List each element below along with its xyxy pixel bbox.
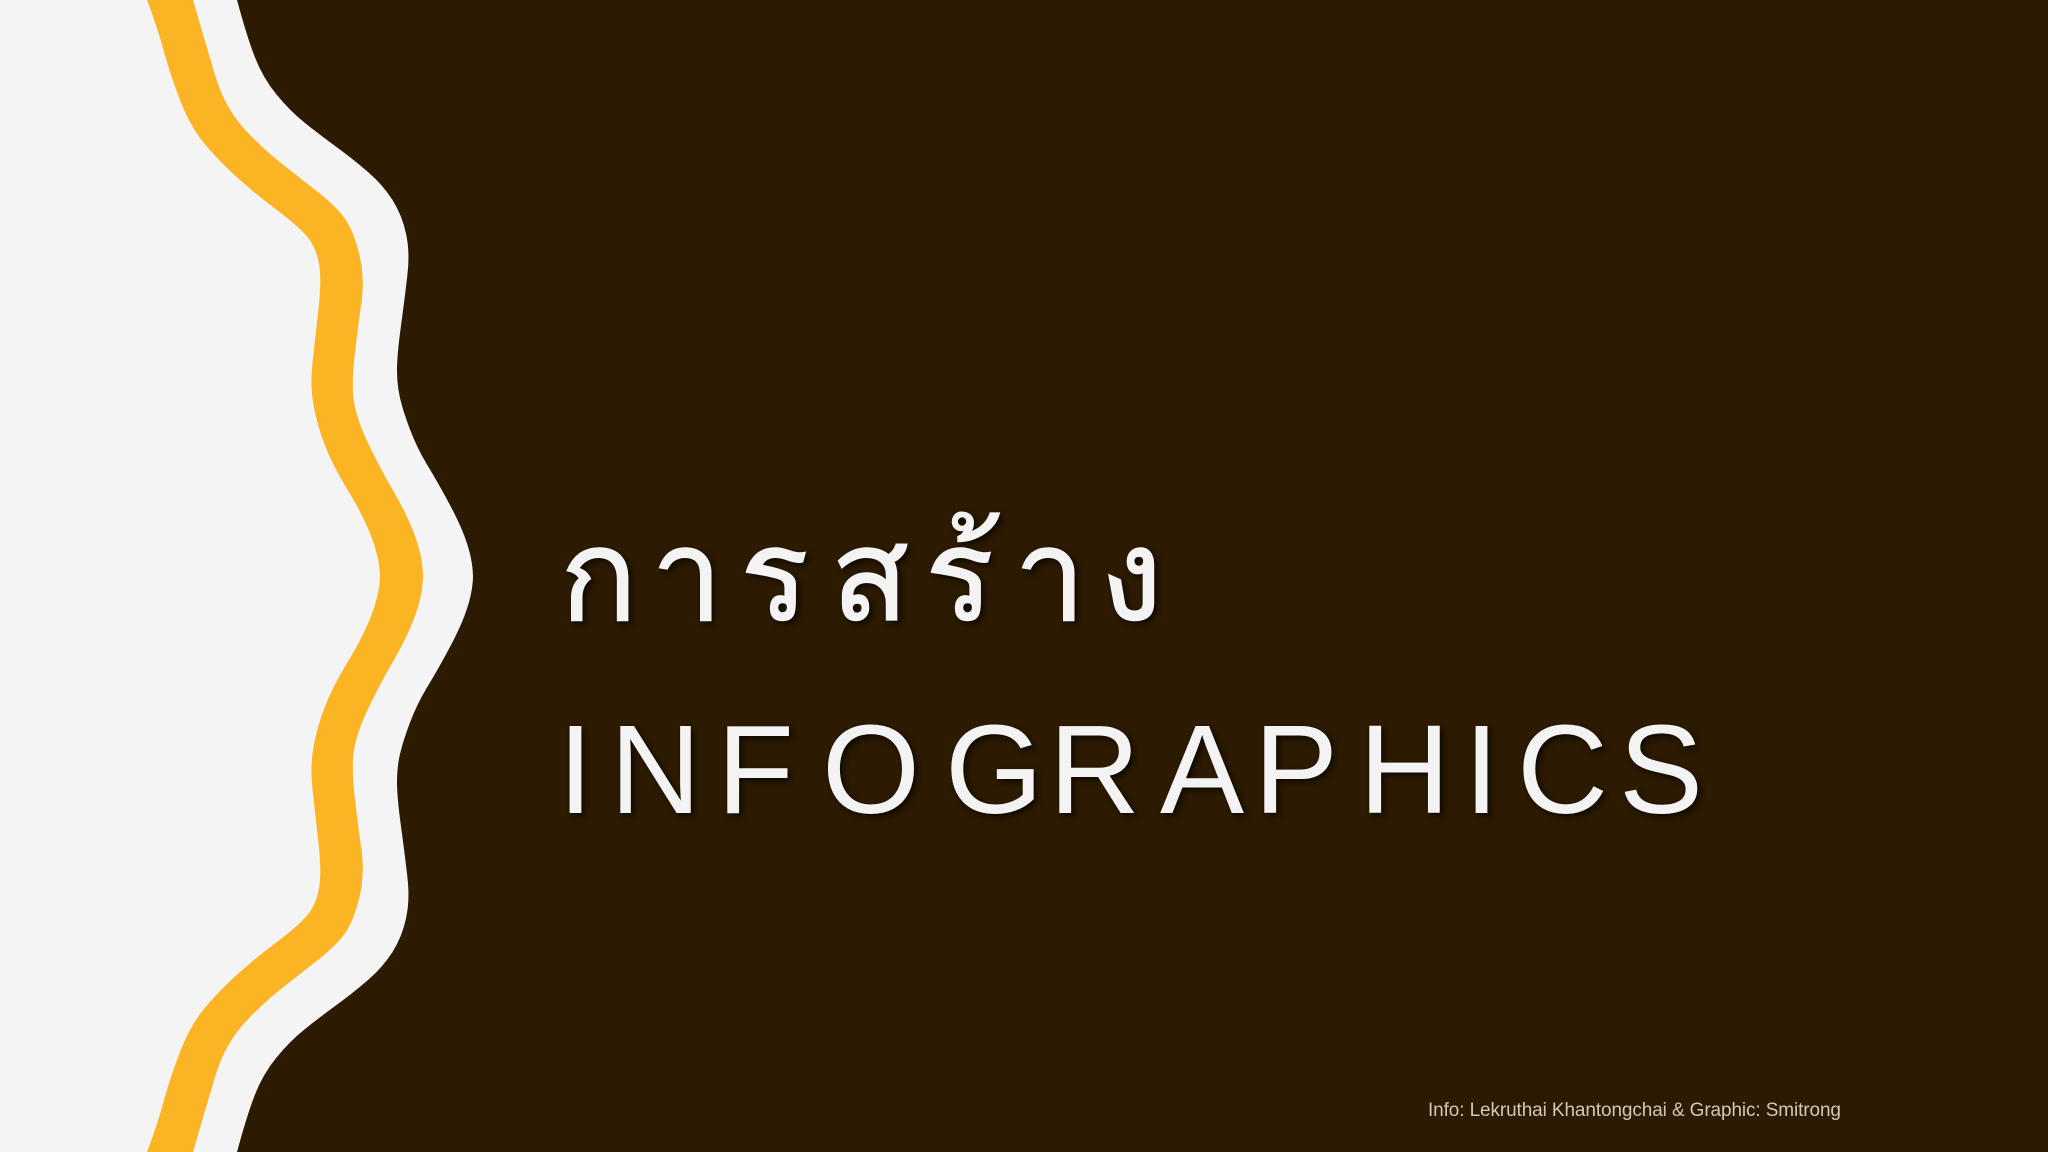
title: Thai line: การสร​้าง — [560, 505, 1162, 648]
wavy yellow band — [147, 0, 423, 1152]
wavy white panel — [0, 0, 473, 1152]
credit line: Info: Lekruthai Khantongchai & Graphic: Smitrong — [1428, 1100, 1841, 1121]
title: INFOGRAPHICS: INFOGRAPHICS — [558, 699, 1703, 840]
